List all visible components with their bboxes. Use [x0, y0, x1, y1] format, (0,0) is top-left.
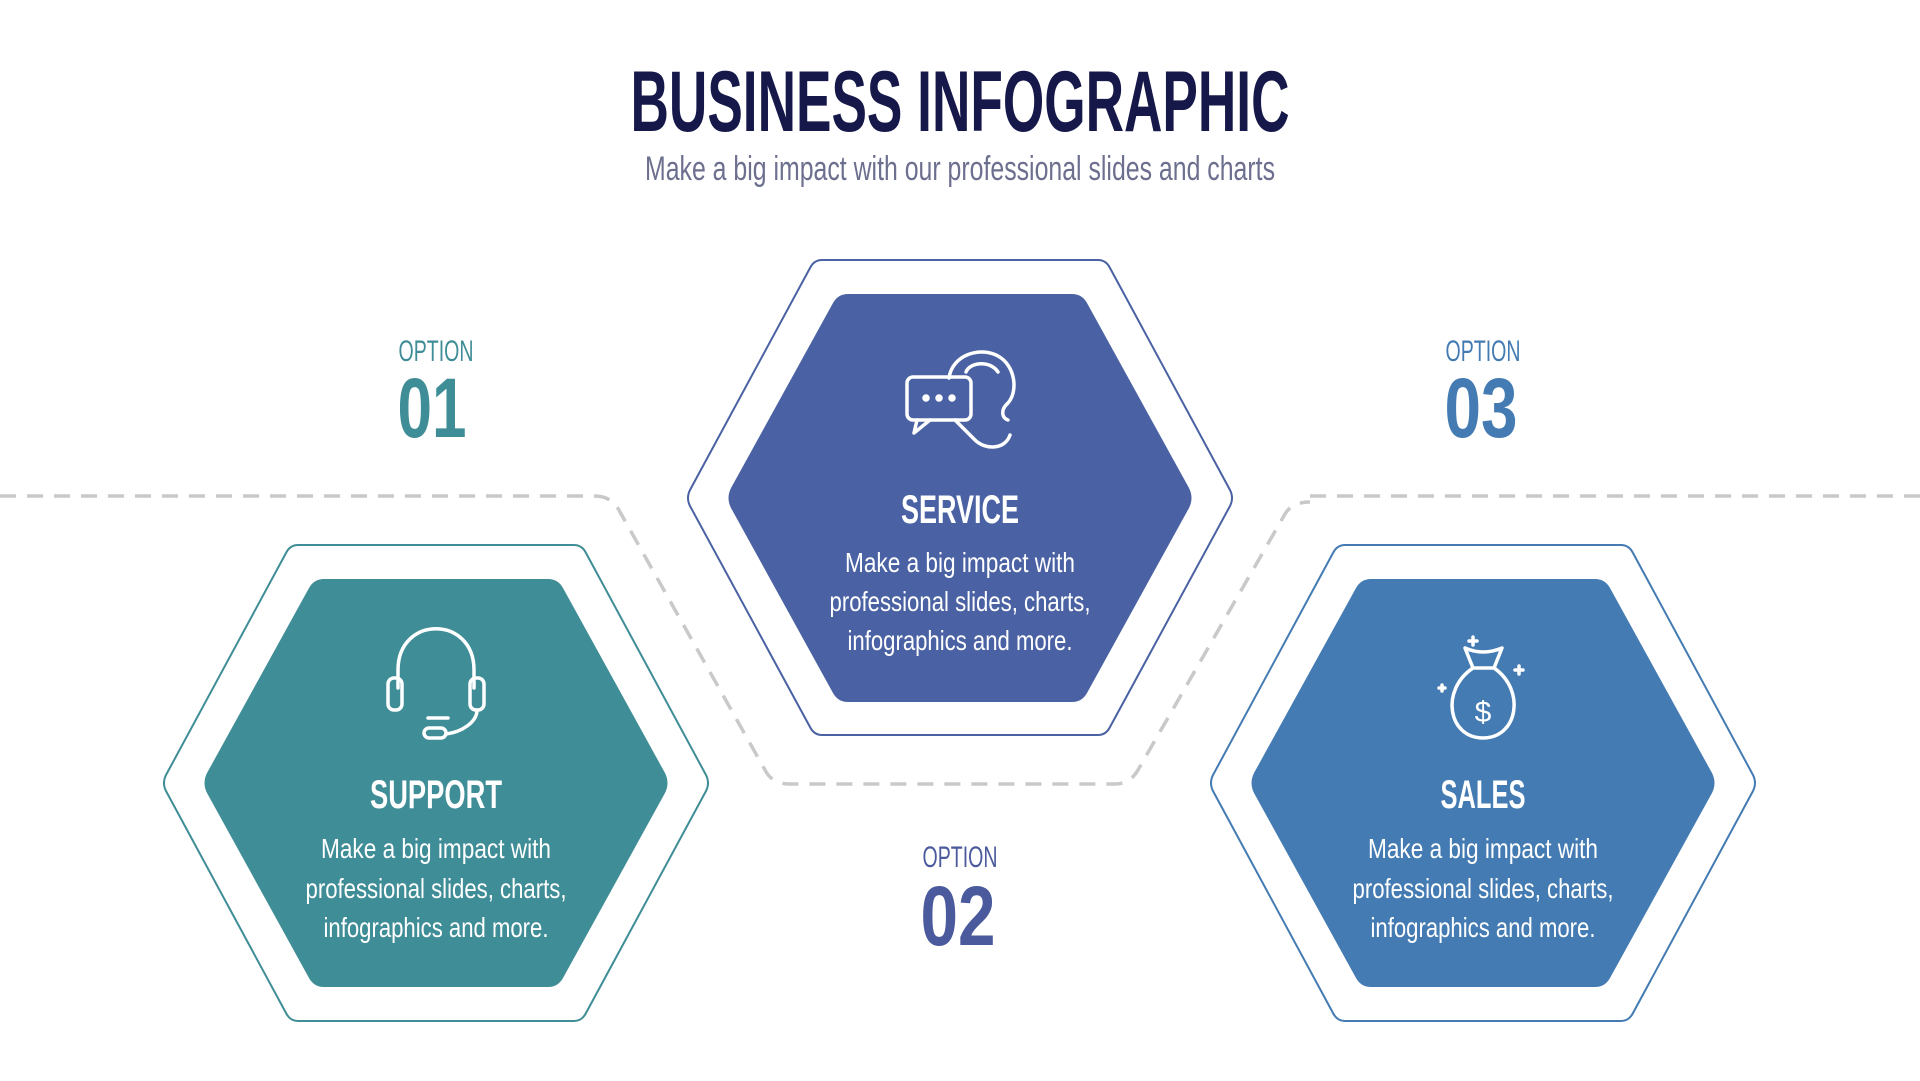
label: option 01 — [398, 335, 474, 455]
panel: support (left hexagon) — [164, 545, 708, 1021]
label: option 03: 03 — [1444, 361, 1518, 455]
label: option 02 — [920, 841, 998, 963]
text block: sales: professional slides, charts, — [1352, 873, 1614, 904]
text block: support: infographics and more. — [324, 912, 548, 943]
panel: sales (right hexagon) — [1211, 545, 1755, 1021]
text block: service — [830, 547, 1090, 656]
dashed connector line — [0, 496, 1310, 784]
heading: SALES: SALES — [1440, 773, 1526, 817]
text block: support: Make a big impact with — [321, 833, 551, 864]
title: BUSINESS INFOGRAPHIC — [630, 54, 1290, 150]
icon: chat and ear — [907, 352, 1014, 447]
text block: service: infographics and more. — [848, 625, 1072, 656]
icon: headset — [388, 629, 484, 738]
text block: service: professional slides, charts, — [830, 586, 1090, 617]
icon: money bag: $ — [1475, 696, 1492, 729]
text block: support — [306, 833, 566, 943]
label: option 01: OPTION — [398, 335, 474, 368]
text block: service: Make a big impact with — [845, 547, 1075, 578]
text block: sales — [1352, 833, 1614, 943]
text block: sales: Make a big impact with — [1368, 833, 1598, 864]
label: option 02: 02 — [920, 869, 996, 963]
subtitle: Make a big impact with our professional slides and charts — [645, 150, 1275, 188]
heading: SERVICE: SERVICE — [901, 488, 1019, 532]
label: option 01: 01 — [398, 361, 466, 455]
heading: SUPPORT: SUPPORT — [370, 773, 502, 817]
panel: service (center hexagon) — [688, 260, 1232, 735]
label: option 03 — [1444, 335, 1520, 455]
text block: support: professional slides, charts, — [306, 873, 566, 904]
text block: sales: infographics and more. — [1370, 912, 1596, 943]
icon: money bag — [1439, 637, 1523, 738]
label: option 02: OPTION — [922, 841, 998, 874]
label: option 03: OPTION — [1446, 335, 1520, 368]
dashed connector right — [1310, 494, 1920, 498]
